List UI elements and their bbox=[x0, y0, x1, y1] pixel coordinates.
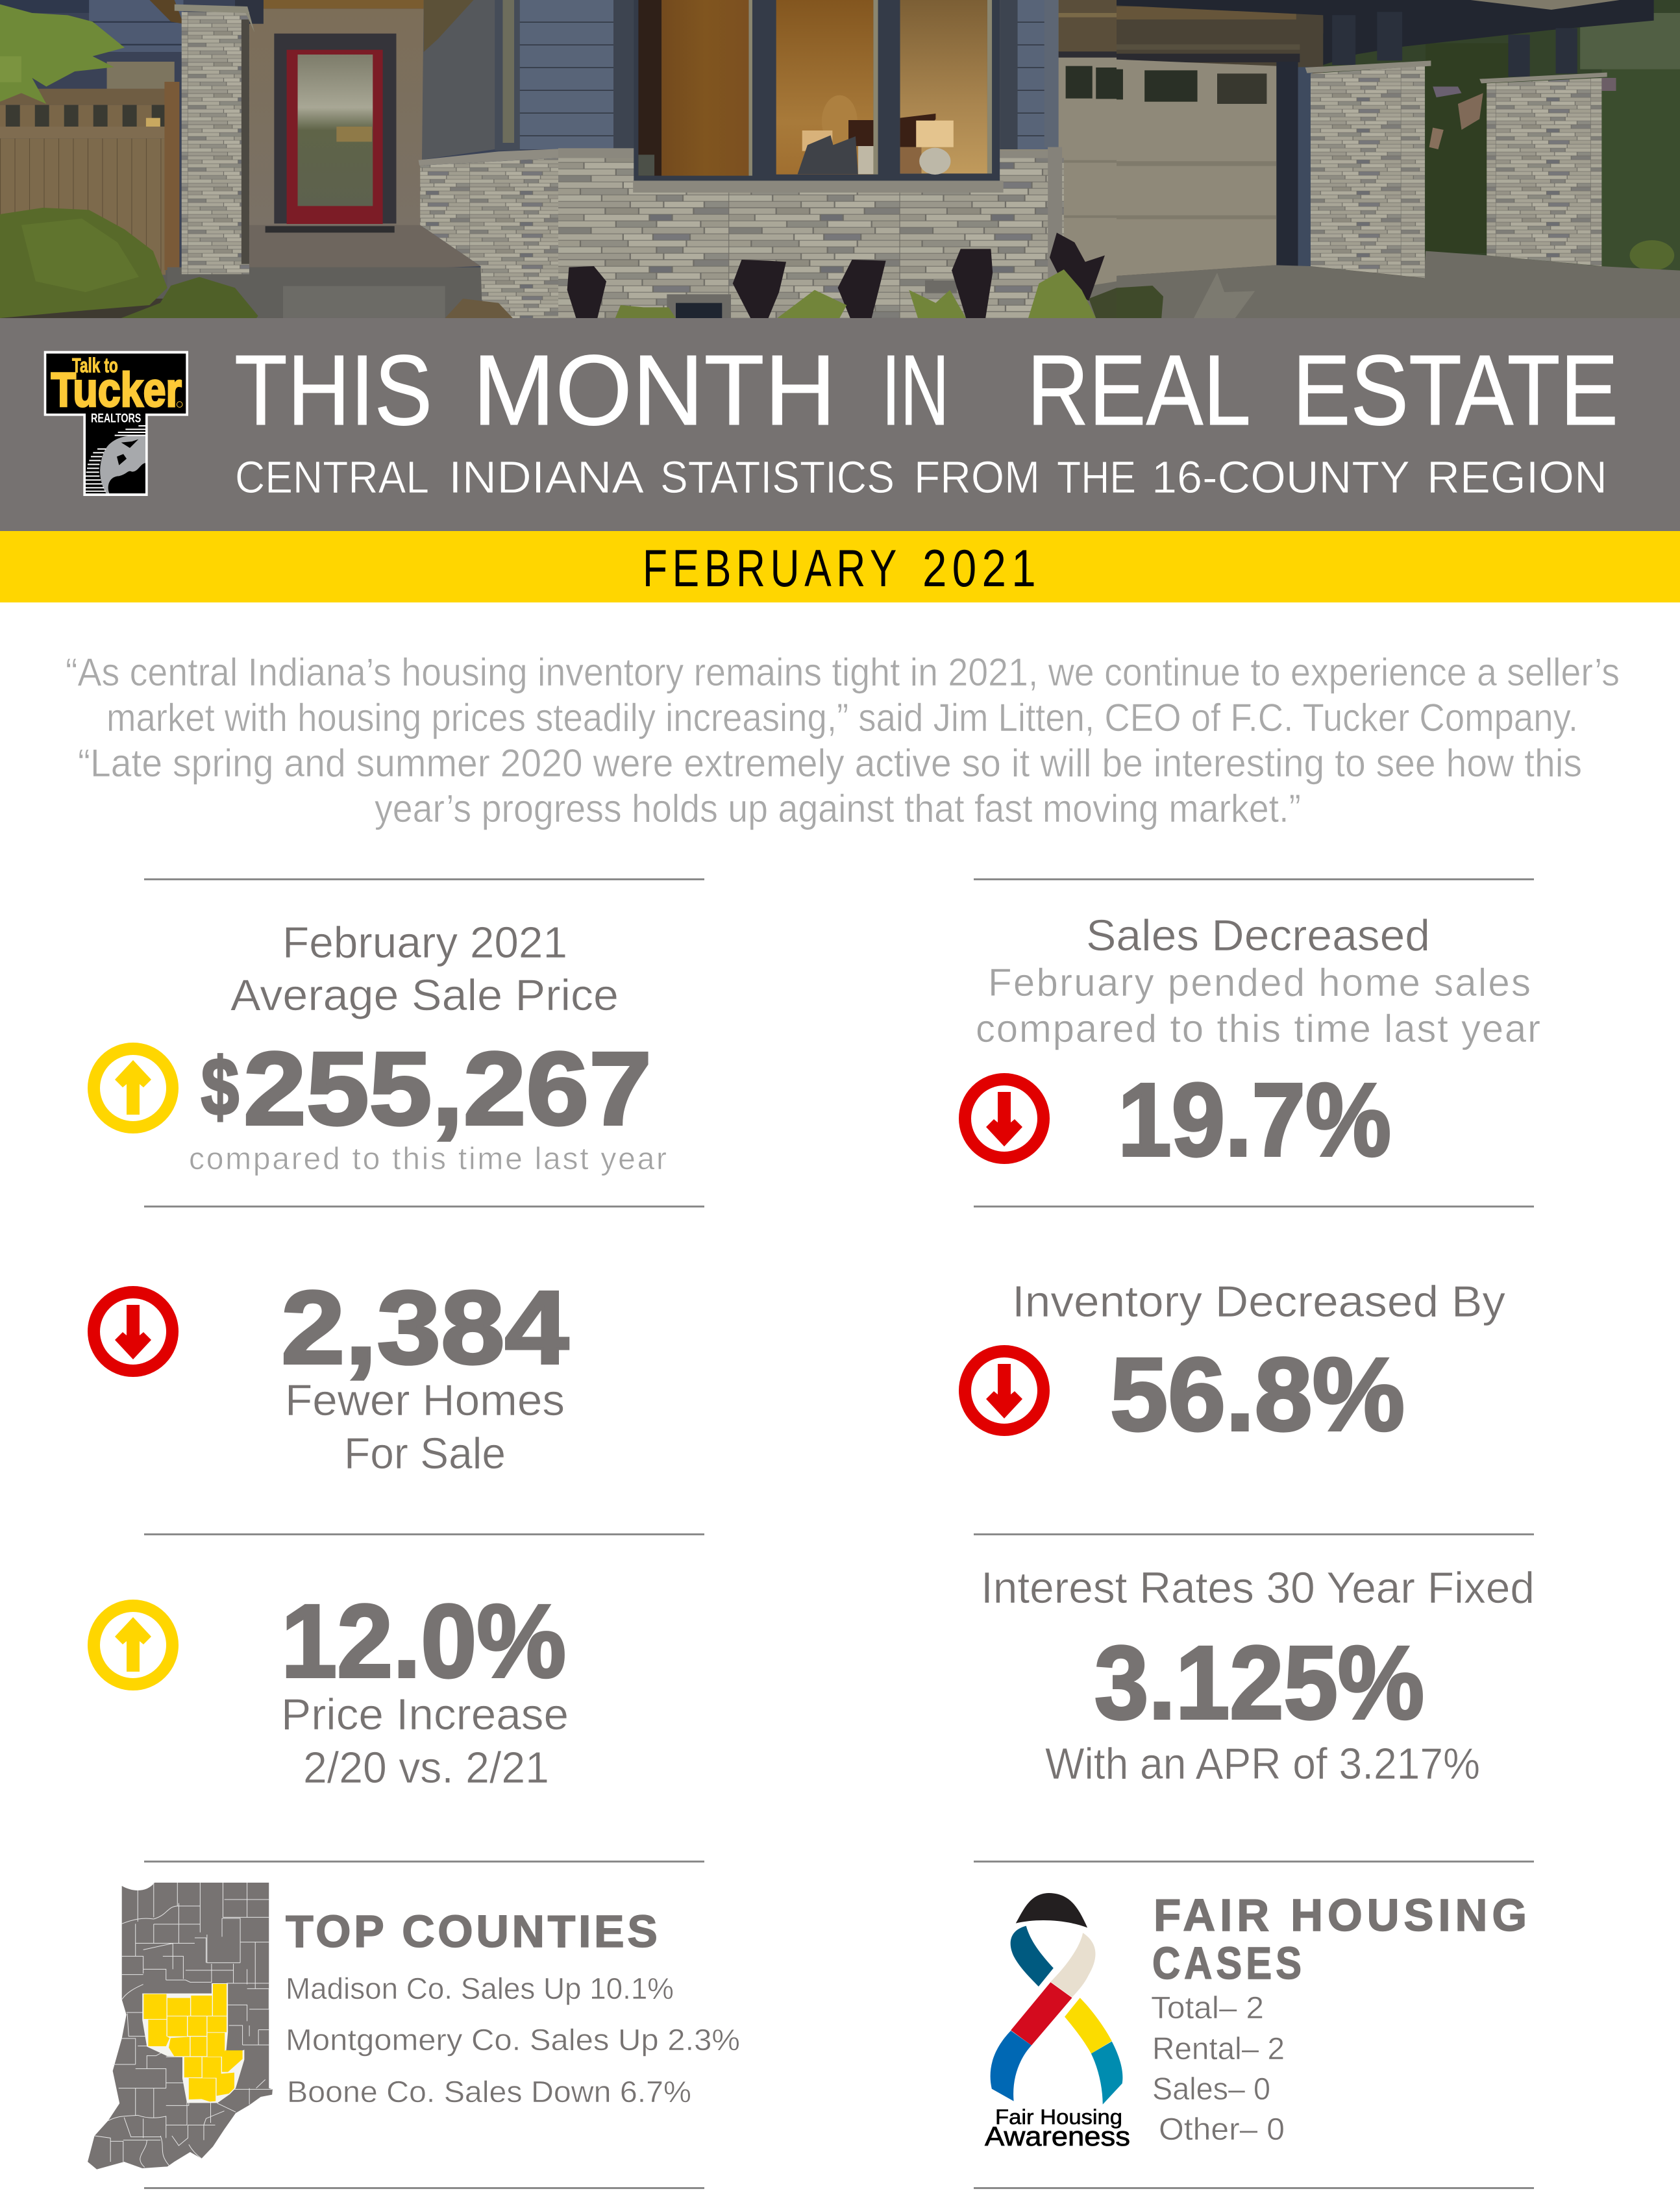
quote text block: market with housing prices steadily increasing,” said Jim Litten, CEO of F.C. Tucker Company. bbox=[106, 696, 1578, 739]
list: case counts: Sales– 0 bbox=[1152, 2072, 1270, 2107]
panel: fewer homes for sale bbox=[93, 1269, 569, 1478]
heading: Inventory Decreased By bbox=[1012, 1277, 1505, 1326]
label: With an APR of 3.217% bbox=[1045, 1739, 1480, 1789]
list: county sales: Madison Co. Sales Up 10.1% bbox=[286, 1972, 674, 2005]
panel: inventory decreased bbox=[965, 1277, 1505, 1452]
number: 12.0% bbox=[281, 1583, 566, 1699]
description bbox=[976, 961, 1540, 1050]
heading: fair housing cases bbox=[1152, 1890, 1531, 1988]
panel: interest rates bbox=[981, 1563, 1535, 1789]
list: county sales: Boone Co. Sales Down 6.7% bbox=[287, 2075, 691, 2109]
subtitle bbox=[235, 452, 1607, 502]
number: 2,384 bbox=[281, 1269, 569, 1385]
subtitle: 16-COUNTY bbox=[1152, 452, 1410, 502]
icon: red down arrow bbox=[965, 1352, 1044, 1430]
panel: fair housing cases bbox=[985, 1890, 1531, 2151]
quote text block bbox=[66, 650, 1620, 830]
header photo: house exterior bbox=[0, 0, 1680, 318]
heading: Interest Rates 30 Year Fixed bbox=[981, 1563, 1535, 1613]
note: compared to this time last year bbox=[189, 1142, 667, 1176]
ribbon caption: Awareness bbox=[985, 2121, 1130, 2151]
heading: fair housing cases: CASES bbox=[1152, 1938, 1305, 1988]
subtitle: FROM bbox=[914, 452, 1040, 502]
icon: red down arrow bbox=[93, 1292, 173, 1371]
subtitle: THE bbox=[1057, 452, 1136, 502]
panel: average sale price bbox=[93, 918, 667, 1176]
dark plants bbox=[567, 266, 606, 318]
list: county sales bbox=[286, 1972, 740, 2109]
subtitle: INDIANA bbox=[449, 452, 644, 502]
panel: sales decreased bbox=[965, 911, 1540, 1178]
list: case counts: Other– 0 bbox=[1159, 2112, 1285, 2147]
list: county sales: Montgomery Co. Sales Up 2.3% bbox=[286, 2023, 740, 2057]
list: case counts: Rental– 2 bbox=[1152, 2032, 1285, 2066]
date banner: 2021 bbox=[922, 539, 1041, 598]
tree foliage bbox=[0, 5, 125, 104]
date banner bbox=[0, 531, 1680, 602]
green plants bbox=[615, 305, 676, 318]
number: 19.7% bbox=[1118, 1061, 1391, 1178]
icon: fair housing ribbon bbox=[991, 1893, 1122, 2105]
label: 2/20 vs. 2/21 bbox=[303, 1743, 549, 1792]
quote text block: year’s progress holds up against that fast moving market.” bbox=[375, 787, 1301, 830]
label: For Sale bbox=[344, 1429, 506, 1478]
list: case counts: Total– 2 bbox=[1151, 1991, 1264, 2025]
gray title band bbox=[0, 318, 1680, 531]
title: THIS bbox=[234, 334, 432, 446]
heading: average sale price: February 2021 bbox=[282, 918, 567, 967]
logo: Talk to Tucker Realtors: REALTORS bbox=[91, 412, 141, 426]
quote text block: “Late spring and summer 2020 were extremely active so it will be interesting to see how this bbox=[78, 741, 1582, 785]
subtitle: CENTRAL bbox=[235, 452, 429, 502]
title: REAL bbox=[1027, 334, 1251, 446]
title bbox=[234, 334, 1618, 446]
list: case counts bbox=[1151, 1991, 1285, 2147]
subtitle: REGION bbox=[1427, 452, 1607, 502]
description: compared to this time last year bbox=[976, 1007, 1540, 1050]
title: ESTATE bbox=[1292, 334, 1618, 446]
heading: average sale price bbox=[230, 918, 619, 1020]
number: average sale price: 255,267 bbox=[243, 1030, 652, 1146]
heading: average sale price: Average Sale Price bbox=[230, 971, 619, 1020]
panel: price increase bbox=[93, 1583, 569, 1792]
date banner: FEBRUARY bbox=[643, 539, 902, 598]
number: 56.8% bbox=[1110, 1336, 1405, 1452]
logo globe bbox=[86, 426, 145, 493]
ribbon caption: Fair Housing bbox=[995, 2105, 1122, 2129]
logo: Talk to Tucker Realtors: Talk to bbox=[72, 353, 118, 377]
icon: yellow up arrow bbox=[93, 1606, 173, 1684]
title: MONTH bbox=[473, 334, 836, 446]
number: average sale price: $ bbox=[201, 1042, 239, 1132]
icon: yellow up arrow bbox=[93, 1049, 173, 1127]
heading: top counties: TOP COUNTIES bbox=[286, 1906, 658, 1957]
label: Price Increase bbox=[281, 1690, 569, 1739]
title: IN bbox=[882, 334, 949, 446]
heading: Sales Decreased bbox=[1086, 911, 1430, 960]
icon: red down arrow bbox=[965, 1079, 1044, 1158]
left shrub bbox=[0, 208, 167, 318]
logo: Talk to Tucker Realtors: Tucker bbox=[51, 363, 182, 417]
description: February pended home sales bbox=[988, 961, 1531, 1004]
number: 3.125% bbox=[1094, 1624, 1424, 1740]
label bbox=[281, 1690, 569, 1792]
label bbox=[285, 1376, 565, 1478]
panel: top counties bbox=[88, 1883, 740, 2170]
subtitle: STATISTICS bbox=[660, 452, 895, 502]
ribbon caption bbox=[985, 2105, 1130, 2151]
logo: Talk to Tucker Realtors bbox=[44, 351, 188, 496]
label: Fewer Homes bbox=[285, 1376, 565, 1425]
map: Indiana counties bbox=[88, 1883, 273, 2170]
heading: fair housing cases: FAIR HOUSING bbox=[1154, 1890, 1531, 1940]
